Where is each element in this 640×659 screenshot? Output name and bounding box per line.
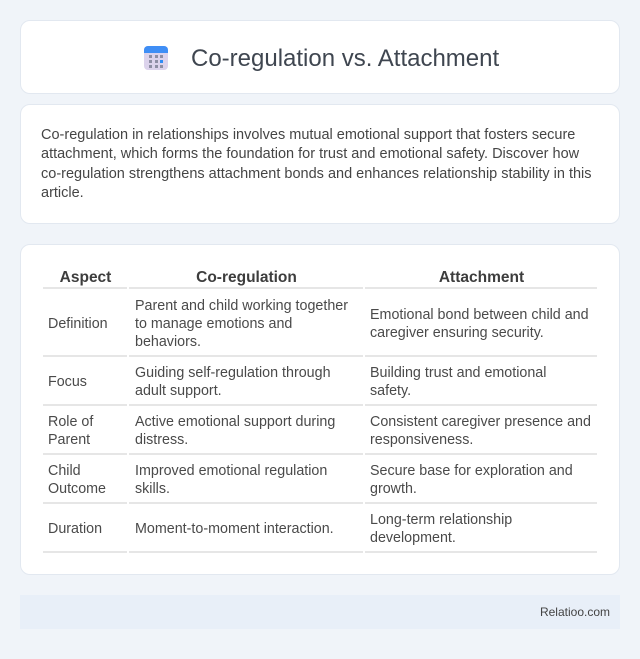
table header: Co-regulation: Co-regulation bbox=[196, 269, 297, 286]
row: Child Outcome: growth. bbox=[370, 481, 417, 497]
row: Role of Parent: distress. bbox=[135, 432, 188, 448]
row: Role of Parent: responsiveness. bbox=[370, 432, 473, 448]
row: Role of Parent: Role of bbox=[48, 414, 93, 430]
row: Child Outcome: Improved emotional regulation bbox=[135, 463, 327, 479]
row: Child Outcome: Secure base for exploration and bbox=[370, 463, 573, 479]
row: Definition: Definition bbox=[48, 316, 108, 332]
row: Duration: Moment-to-moment interaction. bbox=[135, 521, 334, 537]
row: Focus: adult support. bbox=[135, 383, 222, 399]
table header: Aspect: Aspect bbox=[60, 269, 111, 286]
title: Co-regulation vs. Attachment bbox=[191, 45, 499, 72]
panel: comparison table bbox=[20, 244, 620, 575]
row: Definition bbox=[48, 298, 589, 350]
intro paragraph: Co-regulation in relationships involves mutual emotional support that fosters secure bbox=[41, 127, 575, 143]
panel: title card bbox=[20, 20, 620, 94]
table header: Attachment: Attachment bbox=[439, 269, 524, 286]
row: Definition: behaviors. bbox=[135, 334, 201, 350]
row: Focus: Building trust and emotional bbox=[370, 365, 546, 381]
footer bar bbox=[20, 595, 620, 629]
footer credit: Relatioo.com bbox=[540, 605, 610, 619]
row: Role of Parent: Active emotional support during bbox=[135, 414, 335, 430]
row: Definition: caregiver ensuring security. bbox=[370, 325, 544, 341]
row: Duration: development. bbox=[370, 530, 456, 546]
intro paragraph: co-regulation strengthens attachment bonds and enhances relationship stability in this bbox=[41, 166, 592, 182]
intro paragraph: article. bbox=[41, 185, 84, 201]
row: Focus: Focus bbox=[48, 374, 87, 390]
intro paragraph: attachment, which forms the foundation for trust and emotional safety. Discover how bbox=[41, 146, 579, 162]
row: Focus bbox=[48, 365, 546, 399]
row: Role of Parent bbox=[48, 414, 591, 448]
row: Focus: safety. bbox=[370, 383, 411, 399]
row: Role of Parent: Consistent caregiver presence and bbox=[370, 414, 591, 430]
row: Child Outcome: skills. bbox=[135, 481, 170, 497]
row: Definition: Parent and child working together bbox=[135, 298, 348, 314]
row: Role of Parent: Parent bbox=[48, 432, 90, 448]
intro paragraph bbox=[41, 127, 592, 201]
row: Child Outcome: Child bbox=[48, 463, 81, 479]
panel: intro text bbox=[20, 104, 620, 224]
row: Child Outcome: Outcome bbox=[48, 481, 106, 497]
row: Duration: Long-term relationship bbox=[370, 512, 512, 528]
row: Duration: Duration bbox=[48, 521, 102, 537]
row: Definition: to manage emotions and bbox=[135, 316, 292, 332]
row: Child Outcome bbox=[48, 463, 573, 497]
row: Focus: Guiding self-regulation through bbox=[135, 365, 331, 381]
row: Definition: Emotional bond between child and bbox=[370, 307, 589, 323]
icon: calendar bbox=[144, 46, 168, 70]
row: Duration bbox=[48, 512, 512, 546]
